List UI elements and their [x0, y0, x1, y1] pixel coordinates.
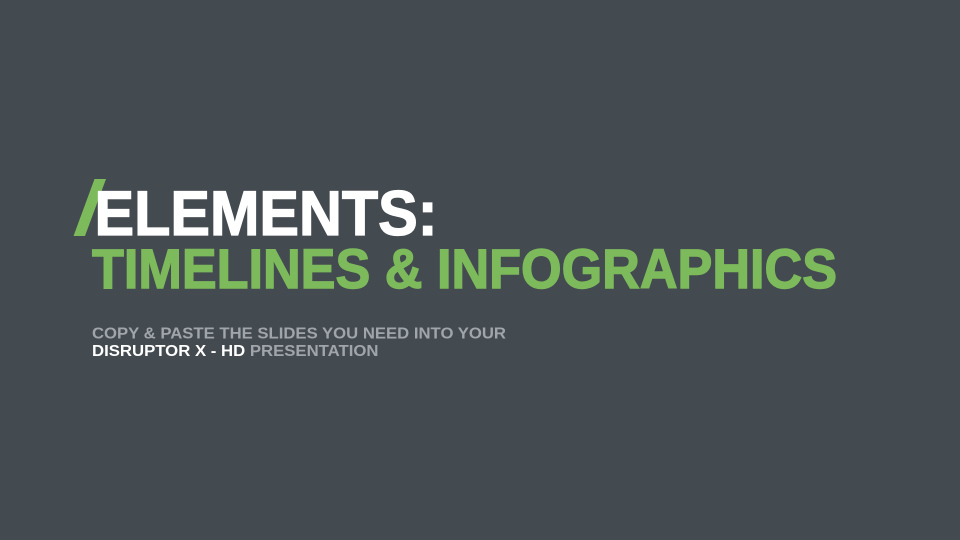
heading: elements: ELEMENTS:: [94, 179, 438, 249]
heading: timelines and infographics: TIMELINES & INFOGRAPHICS: [92, 237, 837, 300]
subtitle line two: DISRUPTOR X - HD PRESENTATION: [92, 343, 378, 360]
icon: green slash: [74, 179, 106, 236]
subtitle line one: COPY & PASTE THE SLIDES YOU NEED INTO YOUR: [92, 326, 506, 342]
